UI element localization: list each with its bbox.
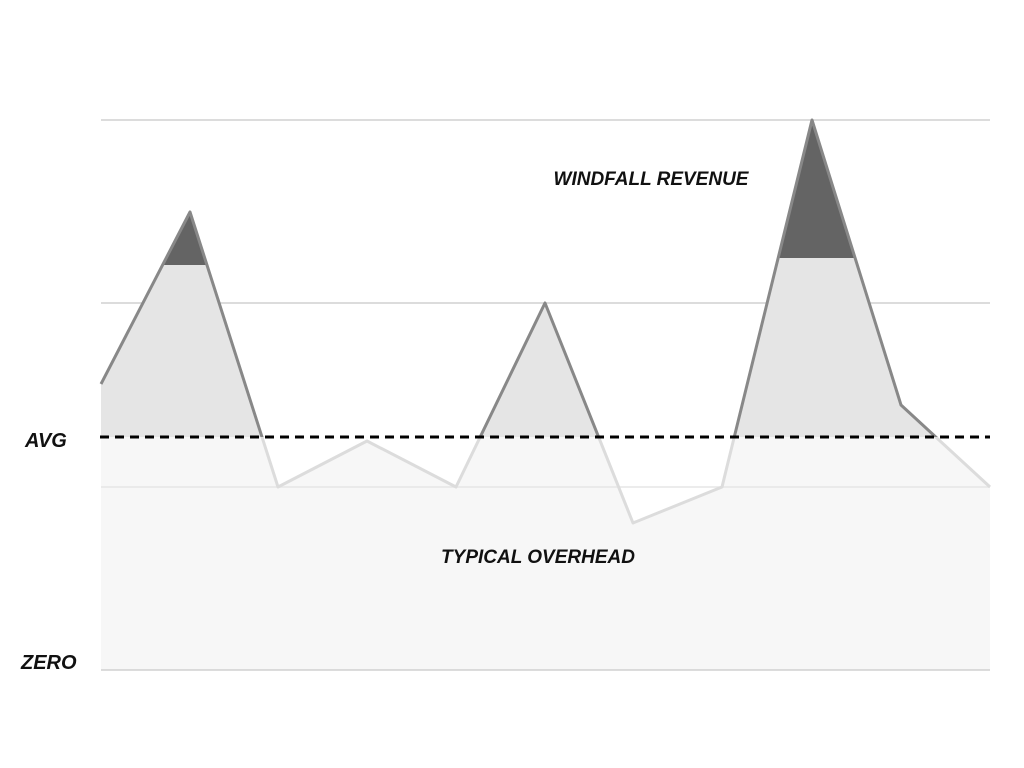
label: AVG: AVG [24, 430, 67, 452]
avg dashed line [100, 436, 990, 438]
label: windfall revenue: WINDFALL REVENUE [554, 169, 750, 190]
area chart [100, 118, 991, 671]
gridlines [101, 120, 990, 303]
label: ZERO: ZERO [20, 652, 77, 674]
label: typical overhead: TYPICAL OVERHEAD [441, 547, 635, 568]
